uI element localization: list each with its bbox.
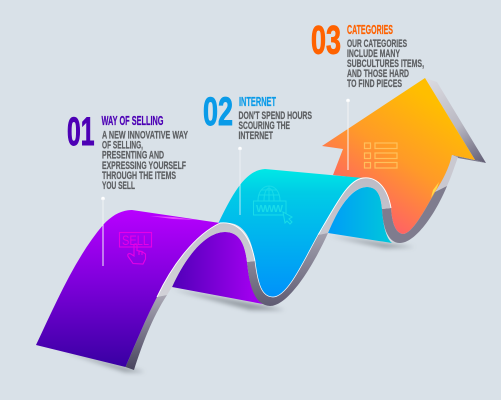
arrow wing underside <box>452 155 486 163</box>
pin line 3 <box>346 99 350 170</box>
purple underside <box>172 232 263 304</box>
icon: sell button with hand: SELL <box>122 233 149 248</box>
step 1 text: YOU SELL <box>102 180 135 192</box>
step 2 number: 02 <box>203 90 233 134</box>
pin line 2 <box>238 147 242 215</box>
icon: www browser globe <box>254 186 292 224</box>
arrow head side edge <box>425 78 486 163</box>
step 1 text: THROUGH THE ITEMS <box>102 170 176 182</box>
step 1 text: EXPRESSING YOURSELF <box>102 160 186 172</box>
step 1 number: 01 <box>67 110 94 154</box>
step 2 heading: INTERNET <box>239 94 276 109</box>
step 3 text: OUR CATEGORIES <box>347 38 407 50</box>
step 3 text <box>347 38 424 90</box>
blue underside <box>328 187 392 243</box>
step 3 number: 03 <box>311 18 341 62</box>
step 1 text: OF SELLING, <box>102 140 143 152</box>
band: arrow stem light <box>435 155 458 192</box>
panel: purple wave <box>36 210 220 367</box>
step 3 heading: CATEGORIES <box>347 22 393 37</box>
pin line 1 <box>101 197 105 266</box>
band: second crest <box>318 178 391 235</box>
purple crest highlight <box>150 216 196 220</box>
step 2 text: DON'T SPEND HOURS <box>238 110 312 122</box>
step 3 text: INCLUDE MANY <box>347 48 401 60</box>
step 3 text: TO FIND PIECES <box>347 78 402 90</box>
step 2 text <box>238 110 312 142</box>
band: second valley <box>247 233 328 306</box>
icon: www browser globe: WWW <box>256 203 283 215</box>
panel: orange arrow <box>322 78 475 234</box>
ground shadows <box>60 236 415 372</box>
crest white edge <box>157 223 255 297</box>
step 2 text: INTERNET <box>238 130 273 142</box>
step 1 text: PRESENTING AND <box>102 150 164 162</box>
arrow highlight <box>431 182 439 198</box>
band: first crest <box>157 223 255 297</box>
band: third valley <box>382 186 447 243</box>
icon: sell button with hand <box>120 232 152 264</box>
step 2 text: SCOURING THE <box>238 120 290 132</box>
band: left foot <box>126 295 167 370</box>
valley white edge <box>255 235 318 297</box>
step 1 text: A NEW INNOVATIVE WAY <box>102 130 189 142</box>
step 1 text <box>102 130 189 192</box>
icon: category list <box>364 143 397 168</box>
step 1 heading: WAY OF SELLING <box>102 113 164 128</box>
panel: blue wave <box>218 169 363 297</box>
crest white edge <box>318 178 391 235</box>
step 3 text: AND THOSE HARD <box>347 68 409 80</box>
step 3 text: SUBCULTURES ITEMS, <box>347 58 424 70</box>
